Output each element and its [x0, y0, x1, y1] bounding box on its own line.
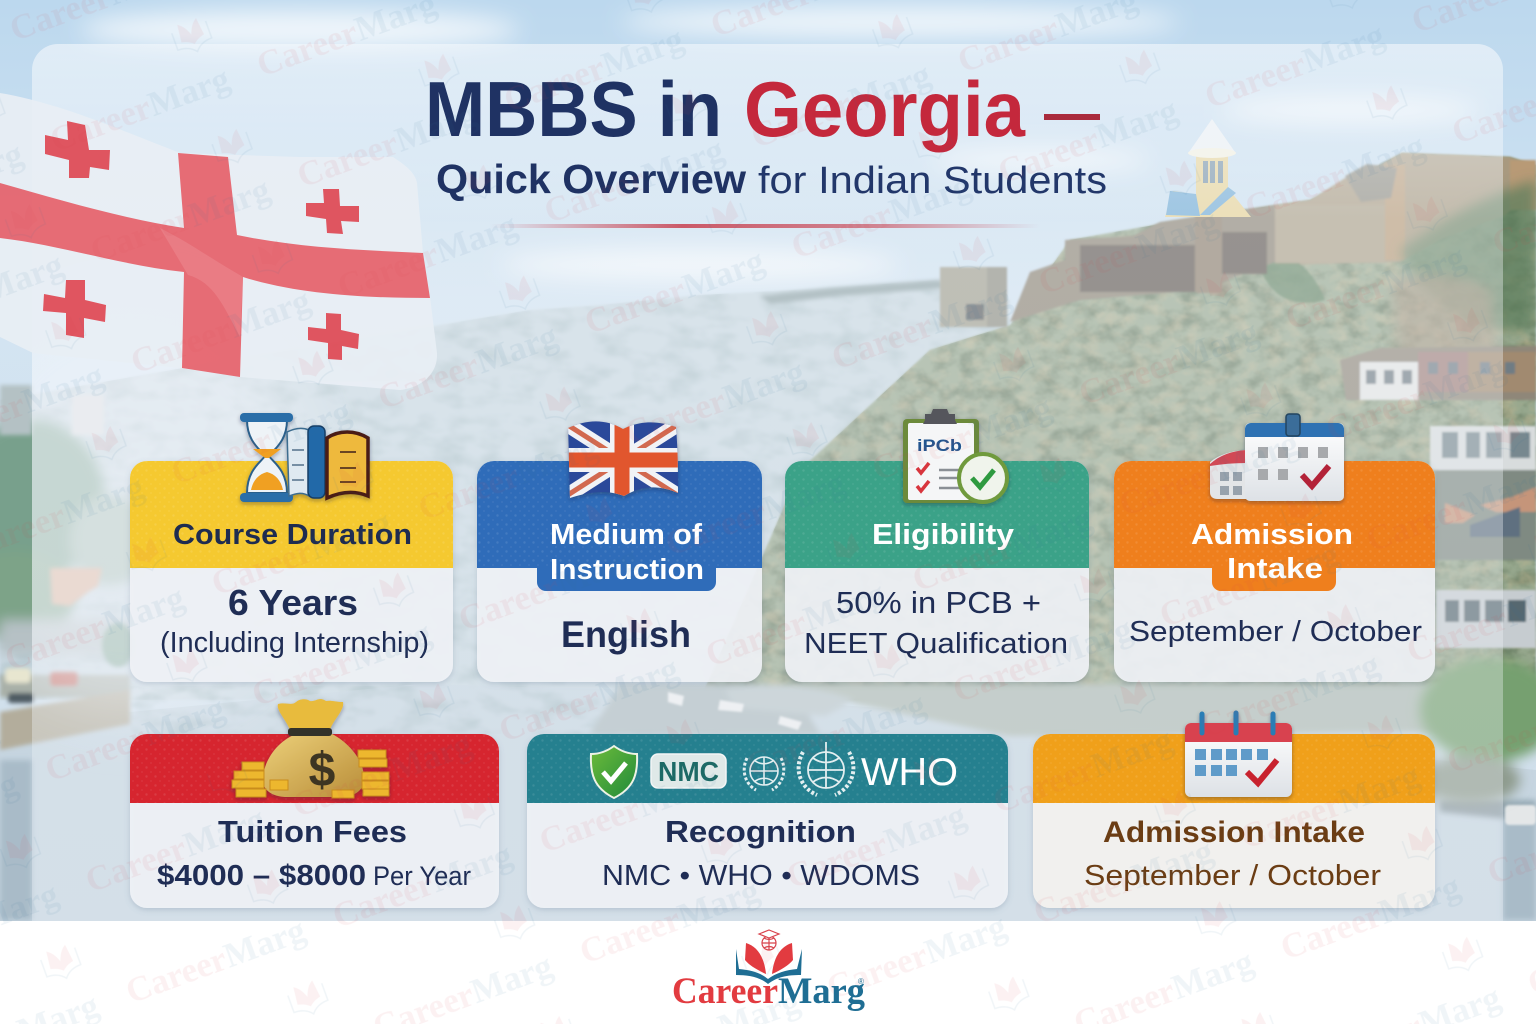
card: admission intake (upper): September / October	[1129, 616, 1422, 648]
square tower	[940, 267, 1007, 327]
card: admission intake (lower): Admission Intake	[1103, 816, 1365, 849]
main hill	[700, 153, 1536, 700]
icon: clipboard with PCB checklist	[903, 409, 1007, 503]
card: medium of instruction: Medium of	[550, 519, 702, 551]
card: admission intake (lower): September / October	[1084, 860, 1381, 892]
subtitle: for Indian Students	[758, 160, 1107, 202]
title: MBBS in	[425, 65, 722, 153]
card: tuition fees: Per Year	[373, 861, 471, 891]
icon: clipboard with PCB checklist: iPCb	[917, 436, 962, 455]
card: admission intake (upper): Intake	[1227, 553, 1323, 585]
card: admission intake (upper): Admission	[1191, 519, 1353, 551]
river and lower town	[0, 684, 1536, 930]
icon: calendar with check	[1185, 713, 1292, 797]
card: eligibility	[785, 409, 1089, 682]
icon: graduation cap and globe	[759, 930, 779, 950]
CareerMarg logo: ®	[858, 977, 864, 986]
CareerMarg logo: Marg	[778, 971, 865, 1012]
card: admission intake (lower)	[1033, 713, 1435, 908]
icon: calendar with building	[1210, 414, 1344, 501]
card: course duration	[130, 413, 453, 682]
card: recognition: NMC • WHO • WDOMS	[602, 860, 920, 892]
card: medium of instruction	[477, 415, 762, 682]
card: course duration: (Including Internship)	[160, 627, 429, 659]
icon: WHO emblem large	[799, 742, 853, 795]
right houses	[1340, 346, 1536, 648]
card: tuition fees: $4000 – $8000	[157, 860, 366, 892]
icon: money bag and coins: $	[309, 744, 336, 797]
left wash behind flag	[32, 354, 297, 722]
card: eligibility: 50% in PCB +	[836, 585, 1041, 620]
card: admission intake (upper)	[1114, 414, 1435, 682]
title: Georgia	[744, 65, 1026, 153]
card: medium of instruction: Instruction	[550, 554, 704, 586]
instruction tab	[537, 566, 716, 591]
CareerMarg logo	[672, 930, 865, 1012]
subtitle	[436, 156, 1107, 202]
card: tuition fees	[130, 699, 499, 908]
title underline	[490, 224, 1040, 228]
icon: hourglass and book	[240, 413, 368, 502]
card: tuition fees: Tuition Fees	[218, 814, 407, 849]
icon: UK flag	[566, 421, 680, 502]
card: medium of instruction: English	[561, 614, 691, 655]
card: eligibility: NEET Qualification	[804, 628, 1068, 660]
card: course duration: Course Duration	[173, 519, 412, 551]
card: recognition	[527, 734, 1008, 908]
upper rock and walls	[1010, 153, 1536, 322]
card: eligibility: Eligibility	[872, 519, 1014, 551]
distant ridge	[0, 280, 1010, 700]
card: recognition: Recognition	[665, 814, 856, 849]
card: recognition: WHO	[861, 751, 958, 794]
icon: shield check	[591, 746, 637, 798]
right trees	[1420, 658, 1536, 804]
intake tab	[1212, 566, 1336, 591]
subtitle: Quick Overview	[436, 156, 746, 202]
left trees and town	[0, 385, 150, 750]
icon: money bag and coins	[232, 699, 389, 798]
footer band	[0, 921, 1536, 1024]
icon: open book	[736, 943, 802, 984]
CareerMarg logo: Career	[672, 971, 778, 1012]
icon: WHO emblem small	[744, 757, 784, 790]
NMC badge: NMC	[658, 756, 719, 787]
Georgian flag	[0, 93, 437, 390]
card: course duration: 6 Years	[228, 582, 358, 623]
title	[425, 65, 1100, 153]
church	[1165, 119, 1251, 217]
